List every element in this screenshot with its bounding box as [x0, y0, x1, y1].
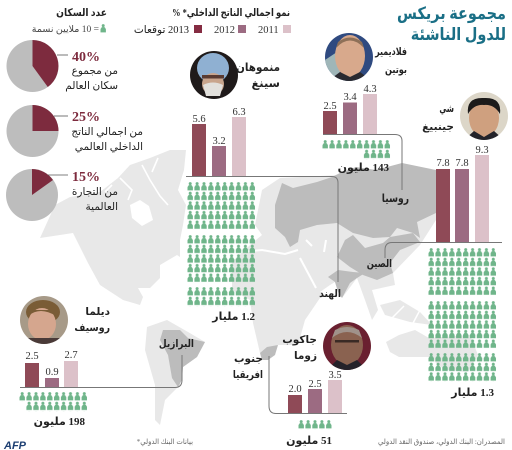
Russia bar chart: 4.3	[363, 84, 377, 95]
pie: trade share: من التجارة	[72, 187, 118, 198]
Brazil bar chart	[25, 350, 78, 387]
India population label: 1.2 مليار	[211, 311, 256, 323]
Brazil bar chart: 0.9	[45, 367, 59, 378]
population heading and legend: = 10 ملايين نسمة	[32, 25, 99, 35]
South Africa label: افريقيا	[233, 369, 263, 381]
title: مجموعة بريكس	[397, 5, 506, 23]
Russia bar chart: 3.4	[343, 92, 357, 103]
South Africa name	[282, 335, 317, 362]
South Africa bar chart: 3.5	[328, 370, 342, 381]
Russia name: فلاديمير	[374, 47, 407, 58]
Russia bar chart	[323, 84, 377, 134]
China population label: 1.3 مليار	[450, 387, 494, 399]
South Africa connector	[269, 356, 347, 414]
China label: الصين	[367, 259, 392, 270]
sources: المصدران: البنك الدولي، صندوق النقد الدولي	[378, 438, 505, 446]
pie: trade share: 15%	[72, 170, 100, 185]
GDP growth heading and legend: 2013 توقعات	[134, 25, 189, 36]
India bar chart: 5.6	[192, 114, 206, 125]
South Africa label	[233, 354, 263, 381]
South Africa population label: 51 مليون	[286, 435, 332, 447]
China bar chart	[436, 145, 489, 242]
pie: trade share	[6, 169, 118, 221]
India leader photo	[190, 51, 238, 99]
India bar chart: 3.2	[212, 136, 226, 147]
China name	[422, 103, 454, 133]
map: Brazil	[160, 330, 205, 387]
title: للدول الناشئة	[411, 26, 506, 44]
GDP growth heading and legend	[134, 8, 291, 36]
South Africa bar chart: 2.0	[288, 384, 302, 395]
map: China	[337, 233, 420, 280]
Brazil population	[19, 392, 88, 411]
map: South Africa	[260, 345, 278, 360]
Russia name: بوتين	[385, 65, 407, 76]
South Africa population	[298, 420, 332, 430]
Brazil population label: 198 مليون	[34, 416, 86, 428]
Brazil bar chart: 2.5	[25, 351, 39, 362]
China connector	[385, 242, 502, 258]
GDP growth heading and legend: 2011	[258, 25, 279, 36]
population heading and legend	[32, 7, 107, 35]
data note: بيانات البنك الدولي*	[137, 438, 193, 446]
China leader photo	[460, 92, 508, 140]
Brazil name: ديلما	[85, 307, 111, 318]
world map	[40, 150, 478, 425]
China bar chart: 9.3	[475, 145, 489, 156]
GDP growth heading and legend: نمو اجمالي الناتج الداخلي* %	[172, 8, 290, 19]
pie: trade share: العالمية	[86, 202, 118, 213]
pie: population share: 40%	[72, 50, 100, 65]
South Africa bar chart: 2.5	[308, 379, 322, 390]
Brazil name: روسيف	[74, 323, 110, 334]
Russia leader photo	[325, 33, 373, 81]
pie: GDP share: 25%	[72, 110, 100, 125]
Brazil leader photo	[20, 296, 68, 344]
pie: GDP share: الداخلي العالمي	[75, 142, 143, 153]
India name	[236, 62, 280, 90]
India population	[187, 182, 256, 306]
India name: سينغ	[251, 78, 280, 90]
Russia name	[374, 47, 407, 76]
Brazil name	[74, 307, 111, 334]
India name: منموهان	[236, 62, 280, 74]
South Africa label: جنوب	[234, 354, 263, 365]
population heading and legend: عدد السكان	[56, 7, 107, 19]
pie: population share: سكان العالم	[65, 81, 118, 92]
pie: GDP share: من اجمالي الناتج	[71, 127, 143, 138]
India bar chart: 6.3	[232, 107, 246, 118]
China population	[428, 248, 497, 382]
Russia connector	[323, 134, 402, 190]
pie: population share: من مجموع	[72, 66, 118, 77]
GDP growth heading and legend: 2012	[214, 25, 235, 36]
pie: population share	[6, 40, 118, 92]
India bar chart	[192, 107, 246, 176]
China bar chart: 7.8	[455, 158, 469, 169]
China name: شي	[439, 103, 454, 114]
China bar chart: 7.8	[436, 158, 450, 169]
India connector	[186, 176, 338, 282]
South Africa leader photo	[323, 322, 371, 370]
Russia label: روسيا	[382, 193, 409, 205]
map: Russia	[275, 163, 436, 247]
Brazil bar chart: 2.7	[64, 350, 78, 361]
pie: GDP share	[6, 105, 143, 157]
China name: جينبيغ	[422, 122, 454, 133]
Brazil connector	[20, 355, 182, 388]
South Africa name: زوما	[294, 351, 317, 362]
India label: الهند	[319, 289, 341, 300]
Russia population	[322, 140, 391, 159]
South Africa bar chart	[288, 370, 342, 413]
map: India	[328, 270, 365, 298]
Russia bar chart: 2.5	[323, 101, 337, 112]
Russia population label: 143 مليون	[338, 162, 390, 174]
South Africa name: جاكوب	[282, 335, 317, 346]
Brazil label: البرازيل	[159, 338, 194, 350]
title	[397, 5, 506, 44]
